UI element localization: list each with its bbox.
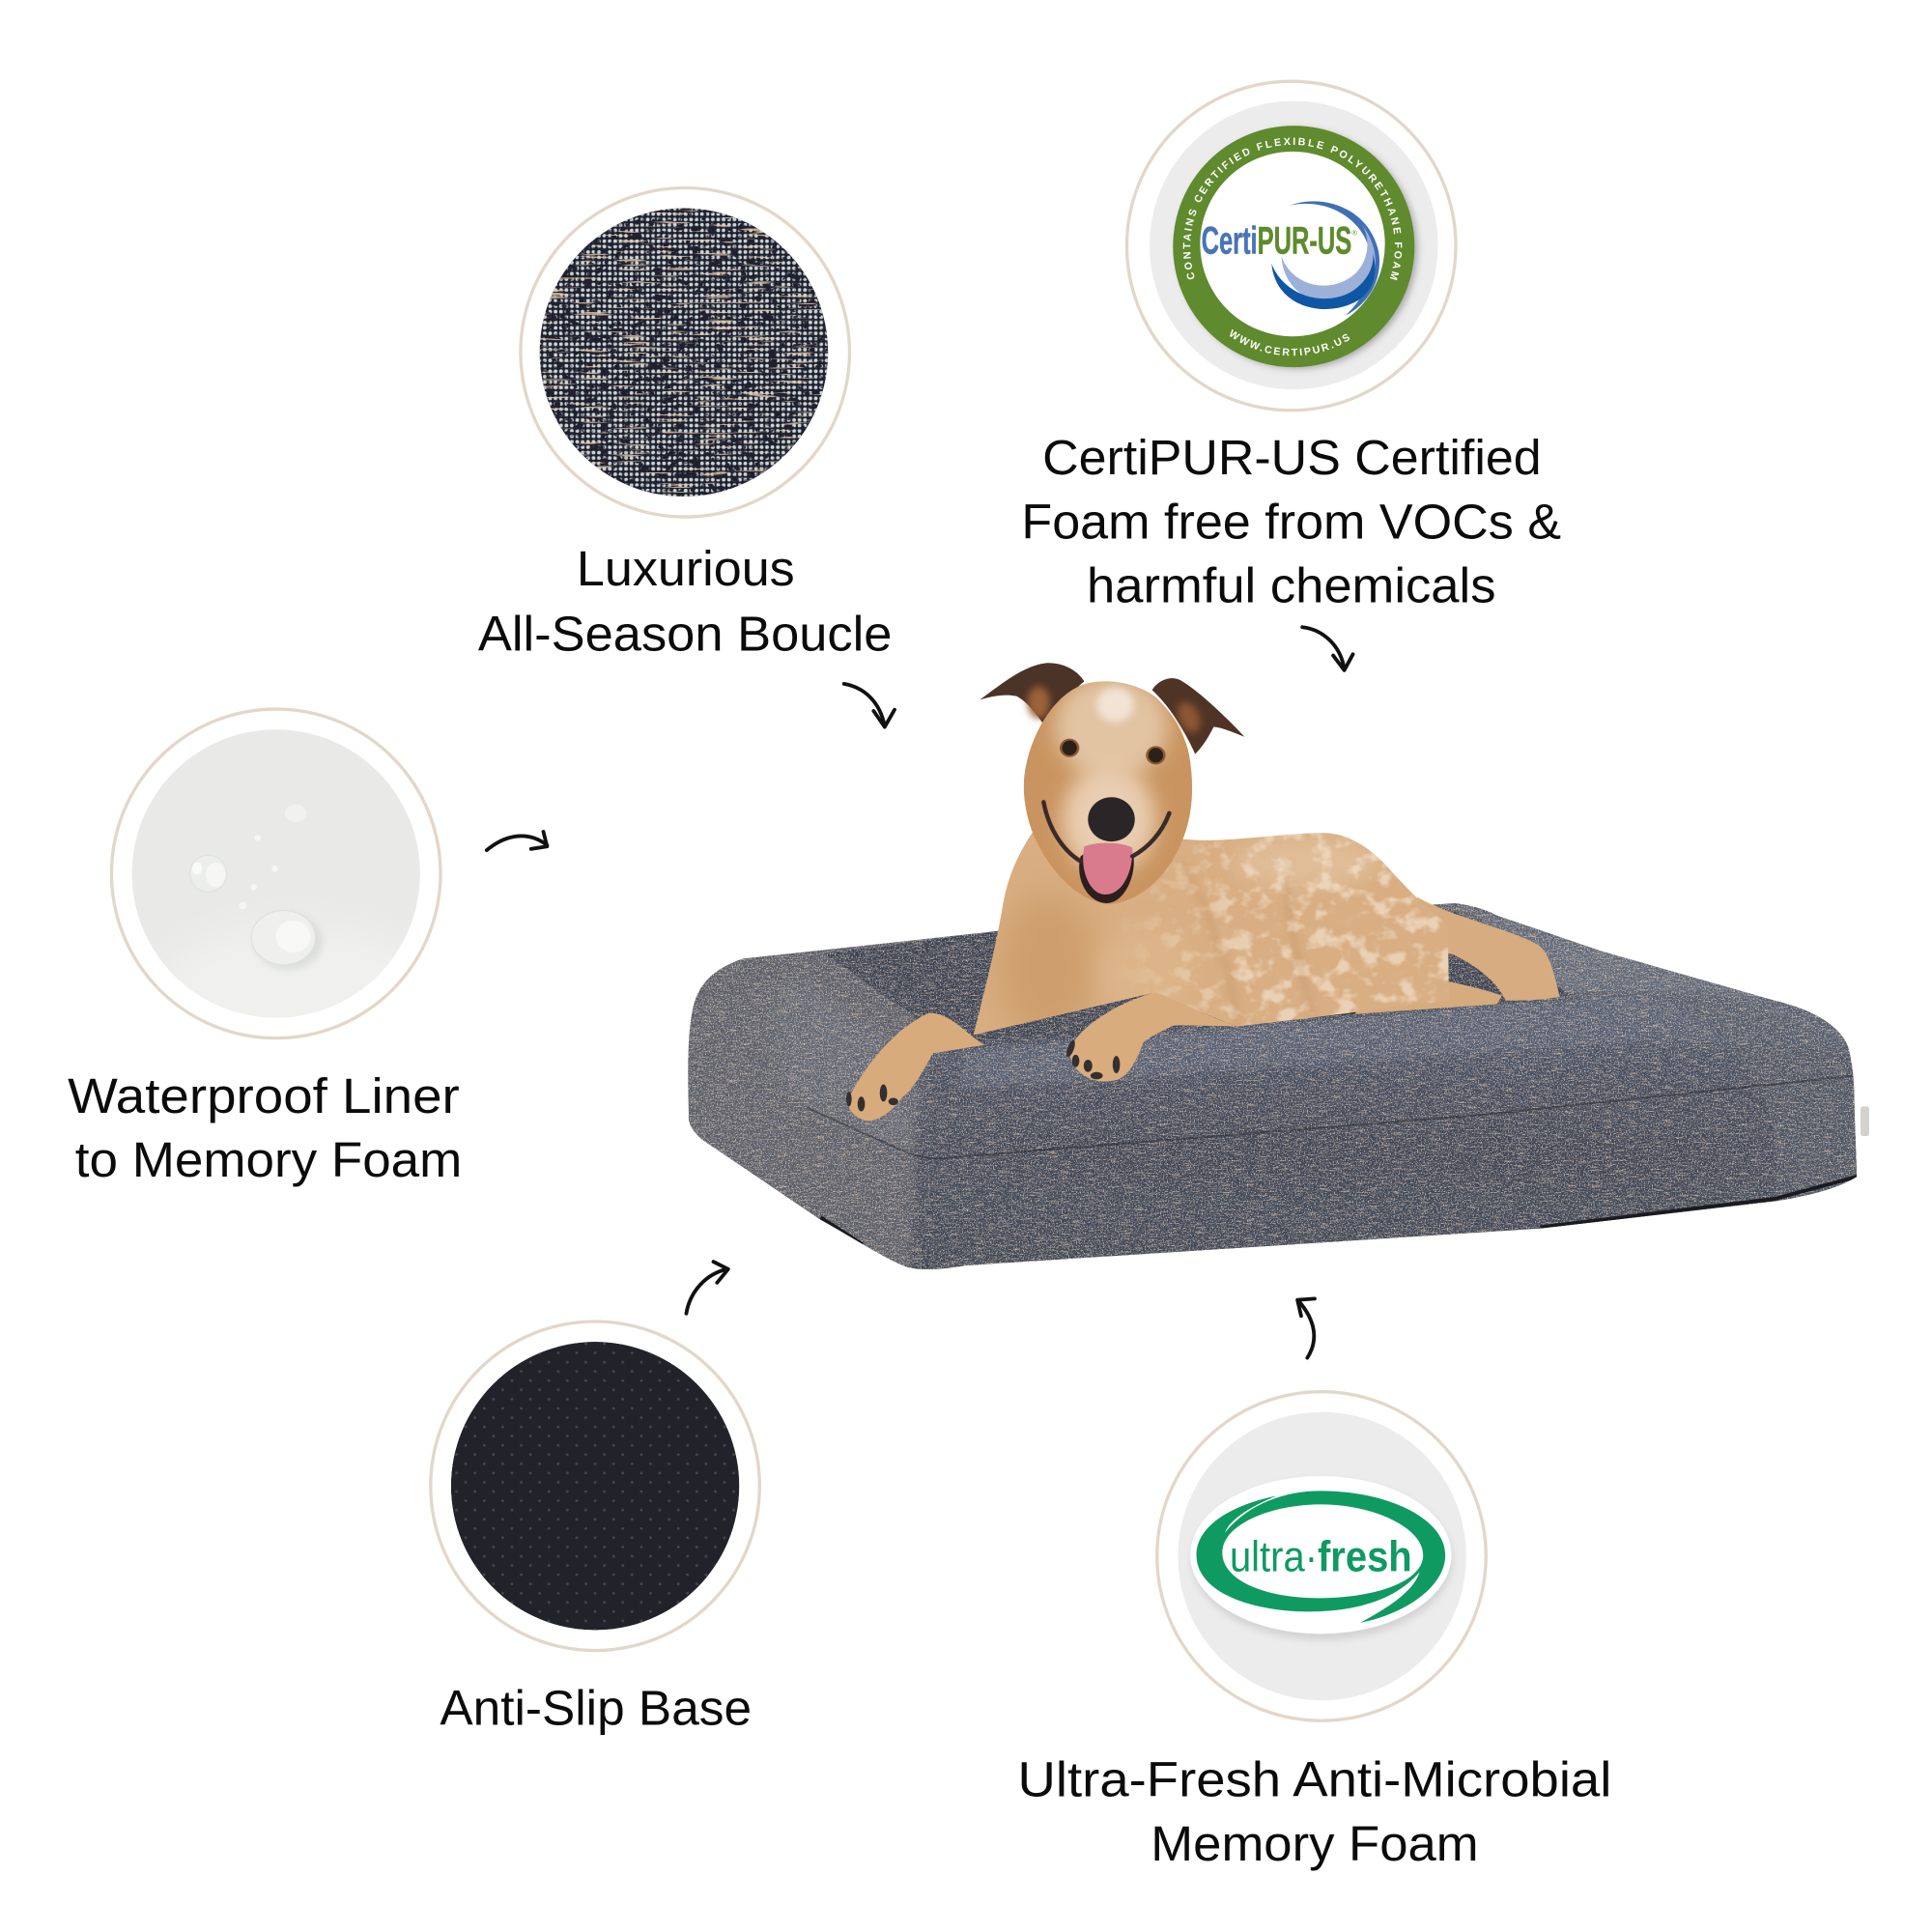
- dog left front leg and paw: [846, 1012, 984, 1121]
- grey badge background: [1178, 1412, 1466, 1700]
- swatch ring: [111, 709, 440, 1038]
- CertiPUR-US logo: WWW.CERTIPUR.US: [1230, 328, 1350, 355]
- dog mouth and tongue: [1043, 802, 1169, 903]
- dog hind leg and tail: [1417, 897, 1560, 1001]
- CertiPUR-US logo: CertiPUR-US: [1202, 220, 1351, 263]
- heading: ultra-fresh: Ultra-Fresh Anti-Microbial: [1018, 1752, 1611, 1807]
- anti-slip swatch: [450, 1342, 740, 1631]
- dog head: [1024, 675, 1192, 904]
- dog eyes: [1060, 739, 1166, 764]
- dog belly shadow: [1305, 980, 1449, 1018]
- CertiPUR-US logo: ®: [1351, 229, 1357, 238]
- heading: waterproof liner: Waterproof Liner: [68, 1068, 460, 1123]
- panel: boucle fabric feature: [478, 188, 895, 727]
- heading: boucle: All-Season Boucle: [478, 606, 892, 661]
- grey badge background: [1150, 101, 1438, 389]
- heading: CertiPUR-US: CertiPUR-US Certified: [1042, 430, 1542, 485]
- CertiPUR-US logo: [1173, 126, 1422, 373]
- heading: ultra-fresh: [1018, 1752, 1611, 1871]
- dog body: [974, 833, 1449, 1036]
- CertiPUR-US logo: CONTAINS CERTIFIED FLEXIBLE POLYURETHANE FOAM: [1182, 137, 1403, 280]
- heading: CertiPUR-US: Foam free from VOCs &: [1021, 494, 1561, 549]
- dog right front leg and paw: [1065, 993, 1237, 1082]
- ultra-fresh logo: ultra·fresh: [1230, 1533, 1412, 1580]
- badge ring: [1126, 81, 1456, 411]
- arrow: base to bed: [686, 1262, 728, 1314]
- heading: boucle: Luxurious: [577, 541, 795, 596]
- dog nose: [1088, 797, 1135, 841]
- swatch ring: [431, 1321, 759, 1651]
- badge ring: [1157, 1392, 1486, 1720]
- arrow: foam to bed: [1297, 1298, 1315, 1358]
- bed shell and faces: [678, 894, 1873, 1275]
- arrow: certification to bed: [1302, 627, 1353, 670]
- boucle fabric swatch: [539, 209, 829, 497]
- heading: waterproof liner: [68, 1068, 462, 1187]
- product: dog: [846, 663, 1560, 1121]
- ultra-fresh logo: [1190, 1476, 1453, 1640]
- heading: CertiPUR-US: [1021, 430, 1561, 613]
- panel: waterproof liner feature: [68, 709, 547, 1187]
- heading: ultra-fresh: Memory Foam: [1151, 1816, 1479, 1871]
- waterproof swatch with droplets: [131, 729, 420, 1018]
- heading: waterproof liner: to Memory Foam: [75, 1132, 462, 1187]
- panel: ultra-fresh feature: [1018, 1298, 1611, 1871]
- product: dog bed: [678, 894, 1873, 1275]
- heading: boucle: [478, 541, 892, 661]
- bed label tag: [1861, 1106, 1869, 1136]
- panel: anti-slip base feature: [431, 1262, 759, 1736]
- arrow: boucle to bed: [844, 684, 895, 727]
- swatch ring: [521, 188, 849, 517]
- arrow: liner to bed: [487, 832, 547, 850]
- panel: CertiPUR-US feature: [1021, 79, 1561, 672]
- dog ears: [980, 663, 1244, 754]
- dog rear foot: [1355, 974, 1502, 1014]
- heading: CertiPUR-US: harmful chemicals: [1087, 558, 1495, 613]
- heading: anti-slip base: Anti-Slip Base: [440, 1681, 752, 1736]
